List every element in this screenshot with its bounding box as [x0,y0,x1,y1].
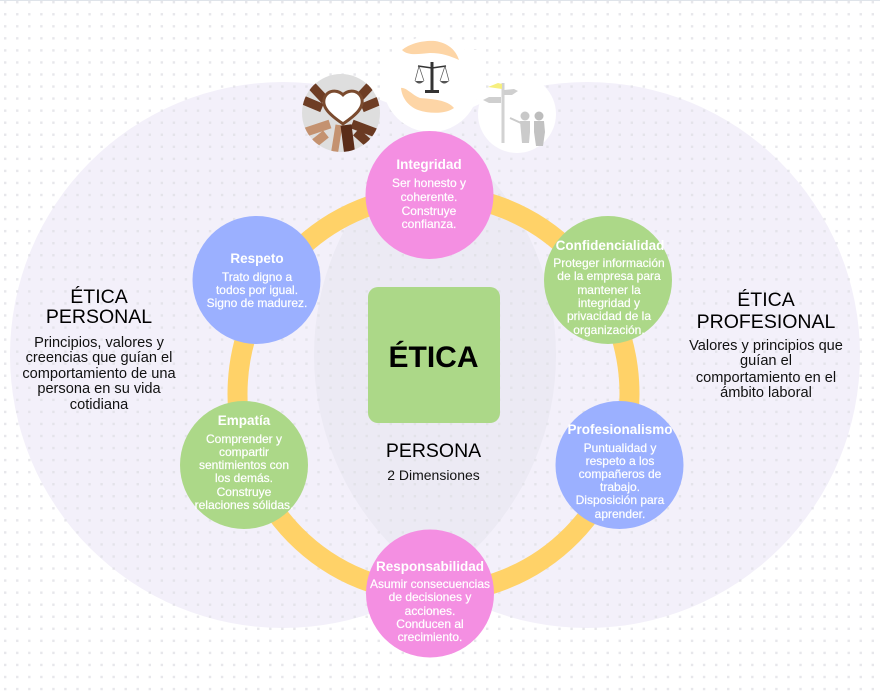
node: Confidencialidad: Confidencialidad [556,238,664,253]
text block: Ética personal: PERSONAL [46,306,152,328]
node: Empatía: Comprender y [206,432,282,446]
node: Profesionalismo: Profesionalismo [567,422,673,437]
node: Empatía: Empatía [218,413,271,428]
text block: Ética profesional [689,288,843,401]
node: Respeto: Trato digno a [222,270,292,284]
node: Confidencialidad: organización. [573,323,645,337]
node: Profesionalismo: trabajo. [600,480,640,494]
icon: hands forming a heart [302,74,380,152]
node: Empatía: los demás. [215,471,273,485]
panel: person overlap lens [314,82,860,628]
text block: Ética profesional: comportamiento en el [696,370,836,386]
node: Empatía: compartir [219,445,269,459]
center box: ÉTICA: ÉTICA [388,340,478,374]
node: Integridad: confianza. [402,217,456,231]
text block: Ética profesional: ÉTICA [737,288,795,311]
node: Profesionalismo: aprender. [595,507,645,521]
text block: Ética profesional: PROFESIONAL [697,311,836,333]
node: Integridad: Construye [402,204,457,218]
text block: Ética personal: creencias que guían el [26,350,172,366]
node: Integridad: Integridad [396,157,462,172]
node: Profesionalismo: compañeros de [579,467,662,481]
node: Responsabilidad: acciones. [405,604,455,618]
node: Respeto: todos por igual. [216,283,298,297]
node: Empatía: sentimientos con [199,458,289,472]
node: Profesionalismo: Puntualidad y [584,441,656,455]
text block: Ética personal: cotidiana [70,397,129,413]
node: Empatía: relaciones sólidas. [195,498,293,512]
node: Responsabilidad: de decisiones y [389,590,471,604]
node: Integridad: Ser honesto y [392,176,466,190]
node: Confidencialidad: mantener la [577,283,641,297]
node: Respeto: Respeto [230,251,284,266]
heading: PERSONA: PERSONA [386,440,481,462]
node: Profesionalismo: respeto a los [586,454,654,468]
text block: Ética personal: comportamiento de una [22,366,177,382]
node: Confidencialidad: integridad y [578,296,640,310]
text block: Ética personal: ÉTICA [70,285,128,308]
node: Confidencialidad: de la empresa para [557,269,661,283]
node: Respeto: Signo de madurez. [207,296,307,310]
text block: Ética personal [22,285,177,413]
panel: professional ethics circle [314,82,860,628]
text block: Ética profesional: guían el [740,353,792,369]
node: Profesionalismo: Disposición para [576,493,665,507]
center box: ÉTICA [368,287,500,423]
node: Empatía: Construye [217,485,272,499]
node: Integridad [366,131,494,259]
node: Confidencialidad [544,216,672,344]
text block: Ética personal: Principios, valores y [34,335,165,351]
icon: scales of justice in hands [383,36,480,132]
text block: Ética personal: persona en su vida [37,381,162,397]
panel: personal ethics circle [10,82,556,628]
node: Responsabilidad: crecimiento. [398,630,462,644]
node: Responsabilidad: Asumir consecuencias [370,577,490,591]
text: 2 Dimensiones: 2 Dimensiones [387,467,480,483]
node: Confidencialidad: privacidad de la [567,309,651,323]
node: Empatía [180,401,308,529]
node: Responsabilidad: Conducen al [396,617,464,631]
node: Responsabilidad: Responsabilidad [376,559,484,574]
node: Confidencialidad: Proteger información [553,256,665,270]
yellow ring [238,195,630,593]
node: Profesionalismo [556,401,684,529]
node: Responsabilidad [366,530,494,658]
node: Integridad: coherente. [401,190,457,204]
text block: Ética profesional: ámbito laboral [720,385,812,401]
node: Respeto [192,216,320,344]
icon: signpost with two figures [478,75,556,153]
text block: Ética profesional: Valores y principios que [689,338,843,354]
